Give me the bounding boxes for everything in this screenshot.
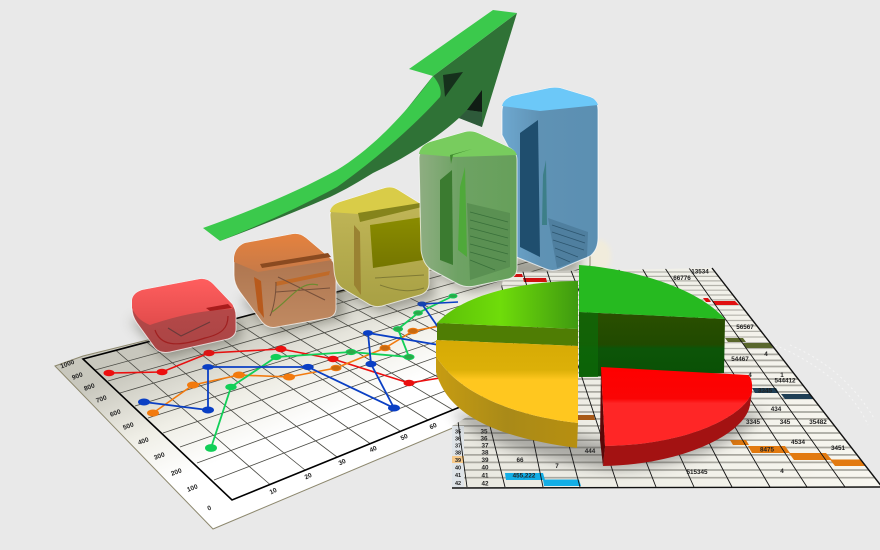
pie: dark green top xyxy=(579,265,725,319)
sheet numbers: 345 xyxy=(780,419,791,426)
x axis labels: 50 xyxy=(400,433,409,442)
sheet numbers: 54467 xyxy=(731,356,749,363)
sheet numbers: 515345 xyxy=(686,469,708,476)
bar: blue column xyxy=(502,88,598,271)
sheet numbers: 7 xyxy=(555,463,559,470)
sheet numbers: 40 xyxy=(481,464,489,472)
y axis labels: 0 xyxy=(207,505,213,512)
sheet numbers: 13534 xyxy=(691,268,709,276)
pie: yellow side xyxy=(436,356,578,448)
sheet numbers: 66 xyxy=(516,457,524,464)
sheet numbers: 41 xyxy=(481,472,489,480)
arrow dark body xyxy=(220,13,517,241)
x axis labels: 30 xyxy=(338,458,347,467)
bar: green column xyxy=(419,131,517,287)
y axis labels: 600 xyxy=(109,408,122,419)
arrow notches xyxy=(443,72,463,97)
y axis labels: 800 xyxy=(83,382,96,393)
x axis labels: 20 xyxy=(304,472,313,481)
sheet border xyxy=(452,268,880,488)
sheet numbers: 35 xyxy=(455,430,461,436)
sheet numbers xyxy=(455,268,845,488)
pie shadow xyxy=(450,410,762,470)
bar: yellow cube xyxy=(330,187,429,307)
y axis labels xyxy=(59,359,213,512)
y axis labels: 200 xyxy=(170,467,183,478)
y axis labels: 700 xyxy=(95,394,108,405)
series: green line xyxy=(206,294,457,451)
sheet numbers: 1 xyxy=(780,372,784,379)
pie: dark green wall xyxy=(579,312,725,377)
white sparkle trail xyxy=(775,345,875,425)
sheet numbers: 42 xyxy=(455,481,461,487)
sheet numbers: 56567 xyxy=(736,324,754,331)
grid lines xyxy=(95,262,590,484)
y axis labels: 900 xyxy=(71,371,84,382)
sheet numbers: 39 xyxy=(481,457,489,464)
bar: orange cube xyxy=(234,234,336,327)
sheet numbers: 8475 xyxy=(760,446,774,454)
coloured cells xyxy=(505,274,871,486)
series: orange line xyxy=(148,326,440,416)
x axis labels: 40 xyxy=(369,445,378,454)
arrow top face xyxy=(203,10,517,241)
sheet numbers: 4 xyxy=(780,468,784,475)
y axis labels: 400 xyxy=(137,436,150,447)
pie chart xyxy=(436,265,752,466)
pie: light green side xyxy=(437,323,578,346)
sheet numbers: 35482 xyxy=(809,419,827,426)
sheet numbers: 36 xyxy=(455,436,461,442)
y axis labels: 100 xyxy=(186,483,199,494)
bar: red cube xyxy=(132,279,236,352)
sheet numbers: 3345 xyxy=(758,388,772,394)
sheet numbers: 544412 xyxy=(774,378,796,384)
series: red line xyxy=(104,346,446,386)
sheet numbers: 4 xyxy=(748,372,752,379)
sheet numbers: 38 xyxy=(481,450,489,456)
sheet numbers: 455,222 xyxy=(513,472,536,480)
sheet numbers: 35 xyxy=(480,428,488,436)
x axis labels: 10 xyxy=(269,487,278,496)
pie: red side xyxy=(603,392,752,466)
y axis labels: 1000 xyxy=(59,359,76,370)
sheet numbers: 42 xyxy=(481,480,489,488)
row header xyxy=(452,426,464,488)
sheet numbers: 4534 xyxy=(791,439,805,446)
series: blue line xyxy=(138,302,458,413)
y axis labels: 300 xyxy=(153,451,166,462)
chart axes xyxy=(83,233,590,500)
sheet numbers: 36 xyxy=(480,436,488,442)
sheet numbers: 37 xyxy=(455,444,461,450)
x axis labels xyxy=(269,422,438,496)
sheet numbers: 3451 xyxy=(831,445,845,452)
spreadsheet paper xyxy=(437,268,880,488)
growth arrow xyxy=(203,10,517,241)
pie: red top xyxy=(601,367,752,446)
sheet numbers: 434 xyxy=(771,406,782,413)
sheet numbers: 444 xyxy=(585,448,596,455)
sheet numbers: 38 xyxy=(455,450,461,456)
sheet numbers: 3345 xyxy=(746,419,760,426)
cube shadows xyxy=(130,250,580,358)
sheet numbers: 66776 xyxy=(673,275,691,282)
line chart paper xyxy=(54,256,590,530)
y axis labels: 500 xyxy=(122,421,135,432)
sheet numbers: 40 xyxy=(455,466,461,472)
pie: light green top xyxy=(437,281,578,329)
sheet numbers: 39 xyxy=(455,458,461,464)
sheet numbers: 41 xyxy=(455,473,461,479)
pie: yellow top xyxy=(436,340,578,423)
x axis labels: 60 xyxy=(429,422,438,431)
sheet numbers: 4 xyxy=(764,351,768,358)
sheet rows and columns xyxy=(437,268,880,488)
glow beside blue column xyxy=(589,240,611,272)
sheet numbers: 37 xyxy=(481,442,489,450)
